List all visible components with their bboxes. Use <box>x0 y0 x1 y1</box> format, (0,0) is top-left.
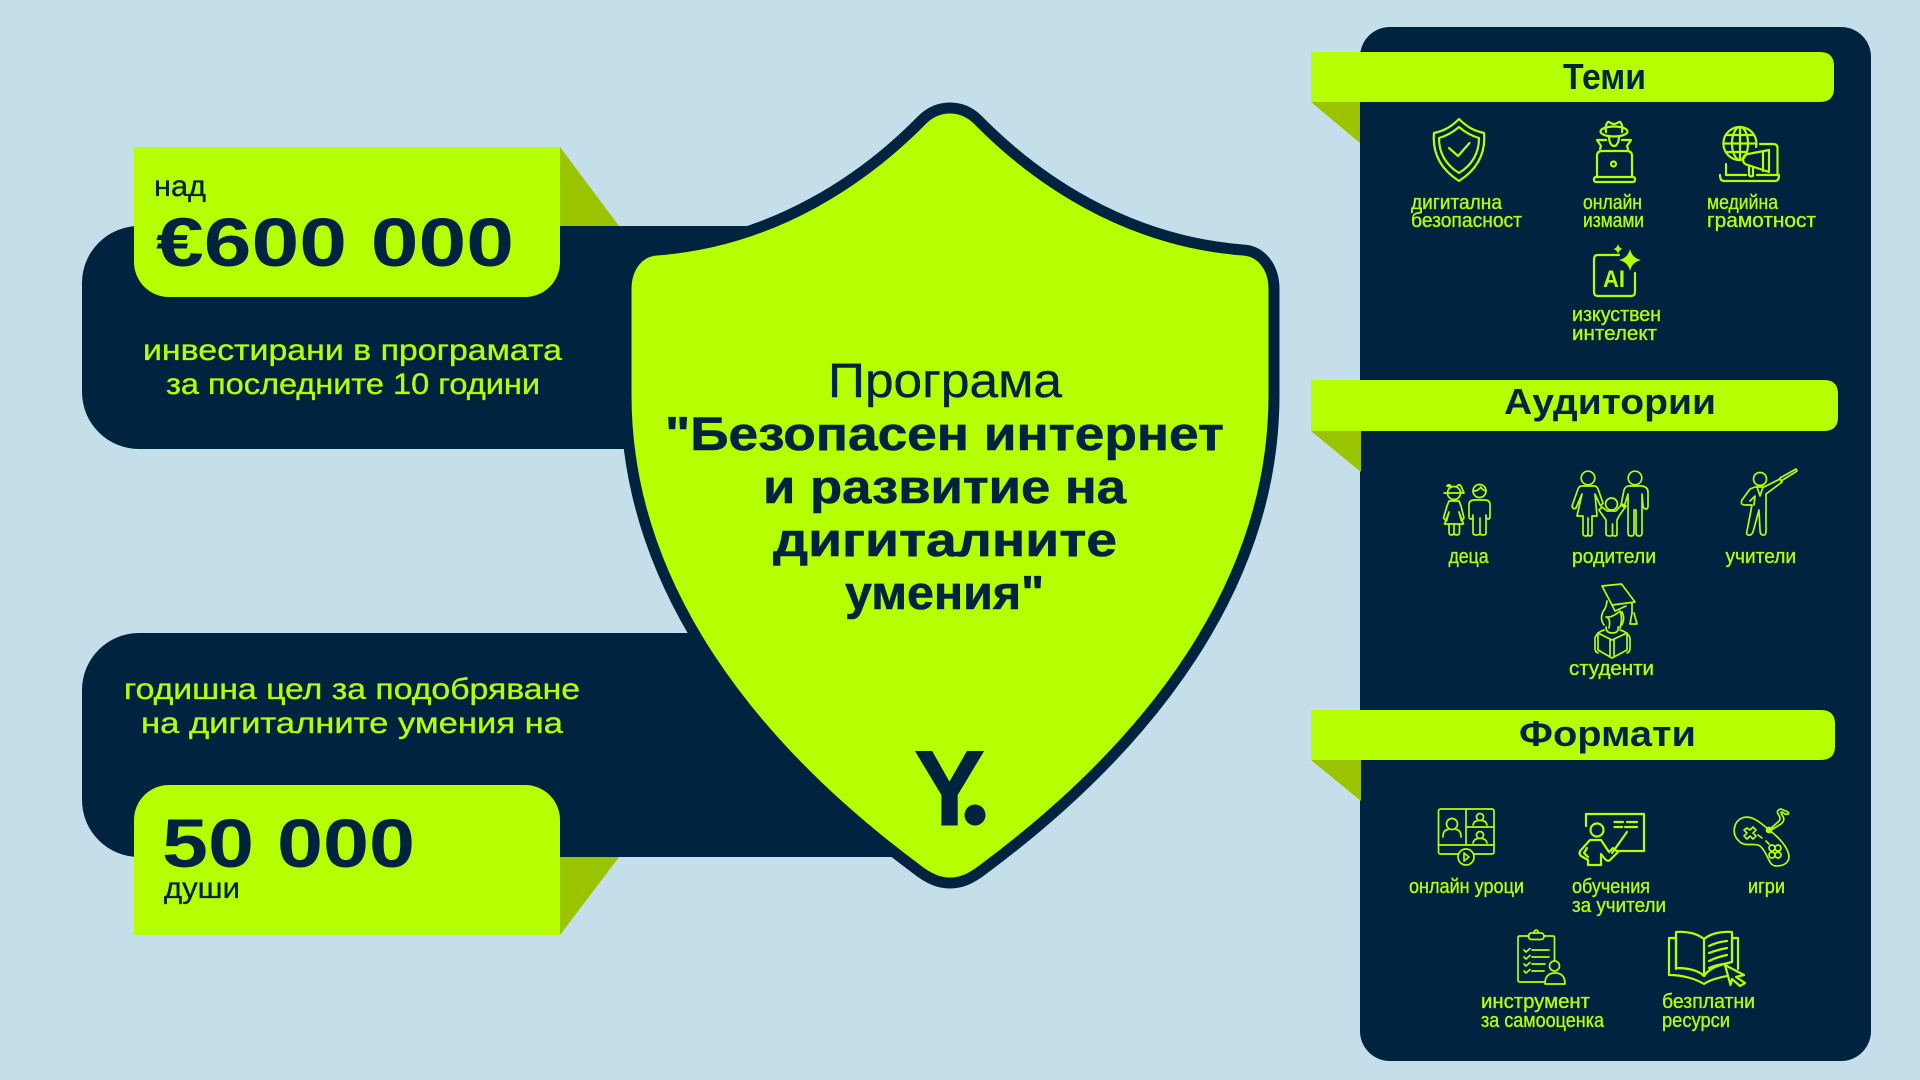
icon: AI: AI <box>1603 266 1625 293</box>
label: children: деца <box>1448 546 1489 568</box>
label: artificial intelligence: интелект <box>1572 323 1657 345</box>
label: media literacy <box>1707 192 1816 232</box>
icon: game controller <box>1734 809 1789 866</box>
title: и развитие на <box>763 460 1127 513</box>
label: media literacy: медийна <box>1707 192 1779 214</box>
text: invested in the programme <box>143 334 562 401</box>
label: parents: родители <box>1572 546 1656 568</box>
label: people: души <box>164 872 240 905</box>
panel: investment <box>82 147 800 449</box>
number: 600000 euro: €600 000 <box>156 204 514 281</box>
icon: teacher <box>1741 469 1797 535</box>
label: teachers: учители <box>1726 546 1796 568</box>
section: formats <box>1311 710 1835 1032</box>
heading: audiences: Аудитории <box>1504 381 1716 422</box>
section: audiences <box>1311 380 1838 680</box>
label: self-assessment tool: инструмент <box>1481 991 1590 1013</box>
logo: Y <box>914 728 985 848</box>
label: teacher training: за учители <box>1572 895 1666 917</box>
icon: teacher training <box>1580 814 1644 865</box>
label: free resources: ресурси <box>1662 1010 1730 1032</box>
icon: student <box>1595 584 1637 658</box>
label: artificial intelligence: изкуствен <box>1572 304 1661 326</box>
text: annual goal: на дигиталните умения на <box>141 707 563 740</box>
icon: family <box>1572 471 1648 536</box>
label: free resources <box>1662 991 1755 1032</box>
label: self-assessment tool: за самооценка <box>1481 1010 1605 1032</box>
label: free resources: безплатни <box>1662 991 1755 1013</box>
label: media literacy: грамотност <box>1707 210 1816 232</box>
title: дигиталните <box>773 513 1117 566</box>
label: digital safety: безопасност <box>1411 210 1522 232</box>
icon: free resources book <box>1669 932 1745 986</box>
icon: AI <box>1594 244 1641 296</box>
label: online scams: измами <box>1583 210 1644 232</box>
panel: central shield <box>626 108 1274 883</box>
title: Програма <box>828 355 1062 408</box>
title: умения" <box>845 566 1044 619</box>
icon: media <box>1720 127 1779 181</box>
icon: shield <box>1434 119 1484 181</box>
label: online scams: онлайн <box>1583 192 1642 214</box>
label: students: студенти <box>1569 658 1654 680</box>
label: self-assessment tool <box>1481 991 1605 1032</box>
label: over: над <box>154 170 206 203</box>
text: invested in the programme: инвестирани в програмата <box>143 334 562 367</box>
label: online lessons: онлайн уроци <box>1409 876 1524 898</box>
text: annual goal <box>124 673 580 740</box>
title: "Безопасен интернет <box>665 407 1224 460</box>
section: topics <box>1311 52 1834 345</box>
label: artificial intelligence <box>1572 304 1661 345</box>
panel: annual goal <box>82 633 950 935</box>
icon: self-assessment clipboard <box>1518 930 1565 984</box>
heading: topics: Теми <box>1563 56 1646 97</box>
number: 50000: 50 000 <box>162 805 415 882</box>
text: annual goal: годишна цел за подобряване <box>124 673 580 706</box>
label: teacher training: обучения <box>1572 876 1650 898</box>
icon: online lessons <box>1438 809 1494 865</box>
icon: children <box>1444 484 1490 535</box>
text: invested in the programme: за последните 10 години <box>166 368 540 401</box>
panel: right column <box>1360 27 1871 1061</box>
label: digital safety <box>1411 192 1522 232</box>
label: online scams <box>1583 192 1644 232</box>
label: teacher training <box>1572 876 1666 917</box>
label: digital safety: дигитална <box>1411 192 1503 214</box>
title <box>665 355 1224 619</box>
icon: hacker <box>1594 122 1635 182</box>
heading: formats: Формати <box>1519 713 1696 754</box>
label: games: игри <box>1748 876 1785 898</box>
